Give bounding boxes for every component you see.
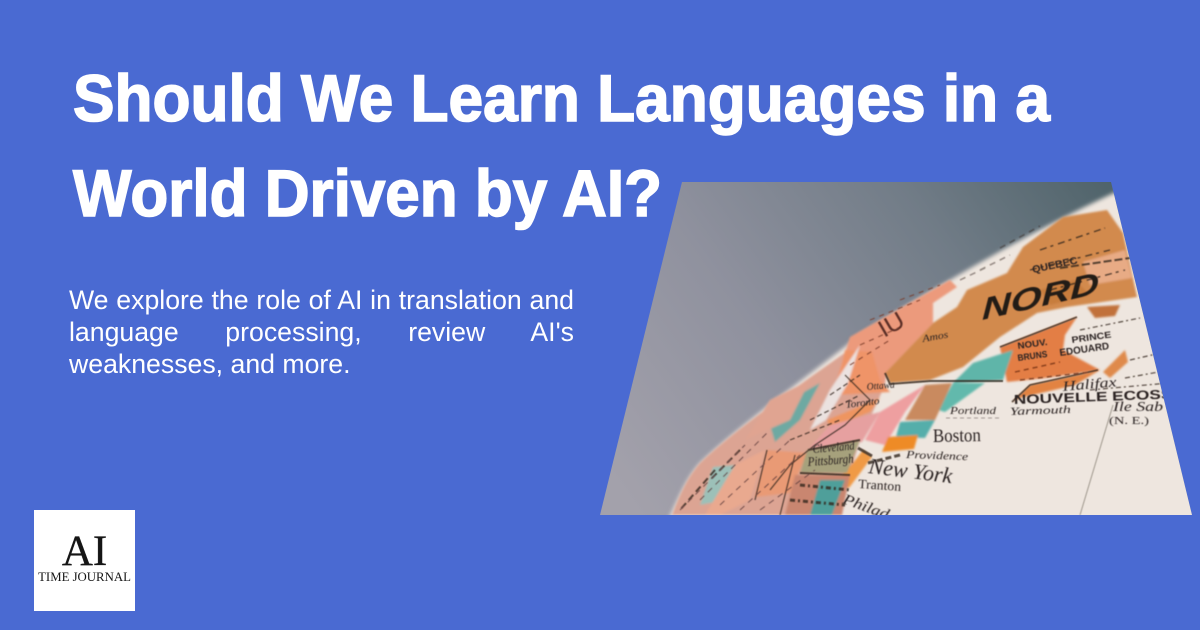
printed place names: New York [866,453,955,488]
printed place names: Ottawa [866,380,895,393]
title: World Driven by AI? [73,156,662,230]
printed place names: BRUNS [1017,349,1048,363]
printed place names: Philad [840,491,892,523]
printed place names: IU [874,307,910,343]
printed place names: Providence [905,449,968,463]
printed place names: Yarmouth [1010,404,1072,418]
text block: description: We explore the role of AI in translation and language processing, review AI's weaknesses, and more. [69,285,574,379]
logo: AI Time Journal: TIME JOURNAL [38,570,131,584]
printed place names: NOUV. [1017,337,1048,351]
printed place names: Amos [920,330,949,345]
printed place names: Ile Sab [1112,400,1163,415]
printed place names: NORD [982,266,1099,327]
printed place names: Pittsburgh [806,451,854,469]
globe surface [668,188,1200,520]
printed place names [806,256,1184,523]
title [72,61,1052,230]
printed place names: QUEBEC [1031,256,1079,276]
photo: globe map in perspective [600,182,1192,515]
logo: AI Time Journal [34,510,135,611]
printed place names: Tranton [858,476,902,494]
printed place names: EDOUARD [1059,341,1110,359]
map borders and printed texture [680,226,1180,515]
printed place names: Boston [933,425,982,447]
printed place names: NOUVELLE ECOSSE [1014,386,1184,407]
mottled land band on the left [672,342,890,515]
printed place names: (N. E.) [1109,416,1149,427]
printed place names: Halifax [1061,375,1118,395]
title: Should We Learn Languages in a [73,61,1051,135]
printed place names: Cleveland [812,438,856,456]
printed place names: Toronto [845,396,880,411]
printed place names: Portland [949,406,997,417]
logo: AI Time Journal: AI [62,528,107,575]
printed place names: PRINCE [1071,330,1112,345]
